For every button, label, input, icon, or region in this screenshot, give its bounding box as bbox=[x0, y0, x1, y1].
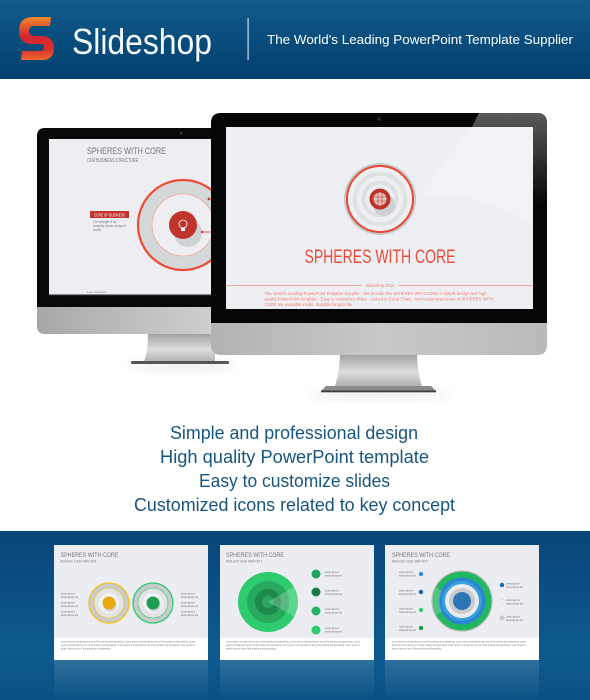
callout: core of business: world bbox=[93, 228, 101, 232]
body text: Lorem Ipsum is simply dummy text of the printing and typesetting. Lorem Ipsum is simply dummy text of the printing and typesetting. Lorem bbox=[226, 640, 361, 644]
callout: core of business bbox=[90, 211, 129, 232]
feature list: Customized icons related to key concept bbox=[134, 494, 455, 515]
dot labels: simply dummy text bbox=[399, 574, 416, 578]
slide thumbnail 3: REPLACE YOUR OWN TEXT bbox=[392, 560, 428, 564]
dot labels: simply dummy text bbox=[399, 610, 416, 614]
dot labels: Lorem ipsum is bbox=[399, 570, 413, 574]
feature list: Easy to customize slides bbox=[199, 470, 390, 491]
icon: Slideshop logo bbox=[19, 17, 54, 60]
icon labels: simply dummy text bbox=[325, 610, 342, 614]
icon labels: simply dummy text bbox=[325, 592, 342, 596]
labels: simply dummy text bbox=[181, 604, 198, 608]
slide description: CORE are available inside. Suitable for pptx file. bbox=[264, 302, 354, 307]
bezel sheen bbox=[472, 113, 547, 205]
slide footer: Logo Company bbox=[87, 290, 106, 294]
slide description: The World's Leading PowerPoint Template Supplier - We provide this SPHERES WITH CORE in simple design and high bbox=[264, 291, 487, 296]
dot labels: simply dummy text bbox=[399, 592, 416, 596]
green sphere bbox=[133, 583, 173, 623]
body text: Ipsum is simply dummy text of the printing and typesetting. Lorem Ipsum is simply dummy text of the printing and typesetting. Lorem Ipsum is bbox=[226, 643, 360, 647]
right monitor bbox=[211, 113, 547, 397]
monitor body bbox=[211, 113, 547, 323]
sphere emblem bbox=[344, 163, 416, 235]
labels bbox=[61, 592, 198, 617]
brand name: Slideshop bbox=[72, 21, 212, 62]
body text bbox=[392, 640, 527, 650]
dot labels: simply dummy text bbox=[399, 628, 416, 632]
slide title: SPHERES WITH CORE bbox=[304, 247, 456, 268]
feature list: Simple and professional design bbox=[170, 422, 418, 443]
dot labels: Lorem ipsum is bbox=[399, 588, 413, 592]
monitor body bbox=[37, 128, 215, 307]
left monitor bbox=[37, 128, 237, 369]
body text: Lorem Ipsum is simply dummy text of the printing and typesetting. Lorem Ipsum is simply dummy text of the printing and typesetting. Lorem bbox=[61, 640, 196, 644]
icon labels: simply dummy text bbox=[325, 574, 342, 578]
feature list bbox=[134, 422, 455, 515]
slide description bbox=[264, 291, 494, 307]
labels: Lorem ipsum is bbox=[61, 592, 75, 596]
slide title: SPHERES WITH CORE bbox=[87, 146, 166, 157]
dot labels: simply dummy text bbox=[506, 618, 523, 622]
slide thumbnail 2: REPLACE YOUR OWN TEXT bbox=[226, 560, 262, 564]
callout: core of business: CORE OF BUSINESS bbox=[94, 212, 125, 218]
dot labels: Lorem ipsum is bbox=[506, 582, 520, 586]
dot labels: Lorem ipsum is bbox=[506, 614, 520, 618]
slide screen bbox=[49, 139, 228, 295]
slide thumbnail 2: SPHERES WITH CORE bbox=[226, 552, 285, 559]
callout: core of business: The strength of our bbox=[93, 220, 118, 224]
labels: simply dummy text bbox=[181, 595, 198, 599]
body text: Lorem Ipsum is simply dummy text of the printing and typesetting. Lorem Ipsum is simply dummy text of the printing and typesetting. Lorem bbox=[392, 640, 527, 644]
monitor stand bbox=[144, 334, 215, 362]
yellow sphere bbox=[89, 583, 129, 623]
dot labels: simply dummy text bbox=[506, 585, 523, 589]
dot labels: simply dummy text bbox=[506, 602, 523, 606]
body text: simply dummy text of the printing and typesetting. bbox=[61, 646, 111, 650]
labels: Lorem ipsum is bbox=[181, 610, 195, 614]
monitor stand bbox=[335, 355, 422, 386]
header bar bbox=[0, 0, 590, 79]
body text bbox=[61, 640, 196, 650]
labels: Lorem ipsum is bbox=[61, 610, 75, 614]
labels: simply dummy text bbox=[61, 613, 78, 617]
body text: simply dummy text of the printing and typesetting. bbox=[226, 646, 276, 650]
bottom band bbox=[0, 531, 590, 700]
divider line bbox=[248, 18, 249, 60]
labels: simply dummy text bbox=[181, 613, 198, 617]
green target chart bbox=[238, 572, 299, 632]
dot labels bbox=[399, 570, 523, 632]
left dots bbox=[419, 572, 423, 630]
icon labels bbox=[325, 570, 342, 634]
slide thumbnail 1 bbox=[54, 545, 208, 700]
slide thumbnail 3 bbox=[385, 545, 539, 700]
body text: Ipsum is simply dummy text of the printing and typesetting. Lorem Ipsum is simply dummy text of the printing and typesetting. Lorem Ipsum is bbox=[392, 643, 526, 647]
dot labels: Lorem ipsum is bbox=[399, 624, 413, 628]
slide thumbnail 1: REPLACE YOUR OWN TEXT bbox=[60, 560, 97, 564]
dot labels: Lorem ipsum is bbox=[506, 598, 520, 602]
slide screen bbox=[226, 127, 533, 309]
sphere diagram bbox=[136, 178, 211, 272]
icon labels: Lorem ipsum is bbox=[325, 607, 339, 611]
right dots bbox=[500, 583, 504, 620]
icon: globe core bbox=[370, 188, 390, 210]
icon labels: simply dummy text bbox=[325, 630, 342, 634]
body text: Ipsum is simply dummy text of the printing and typesetting. Lorem Ipsum is simply dummy text of the printing and typesetting. Lorem Ipsum is bbox=[61, 643, 195, 647]
feature list: High quality PowerPoint template bbox=[160, 446, 429, 467]
icon labels: Lorem ipsum is bbox=[325, 570, 339, 574]
labels: simply dummy text bbox=[61, 604, 78, 608]
icon labels: Lorem ipsum is bbox=[325, 588, 339, 592]
blue and green sphere chart bbox=[432, 571, 492, 631]
slide thumbnail 3: SPHERES WITH CORE bbox=[392, 552, 451, 559]
slide description: quality PowerPoint template - Easy to customize slides - Linked to Excel Chart - And customized icons of SPHERES WITH bbox=[264, 296, 494, 302]
labels: Lorem ipsum is bbox=[181, 600, 195, 604]
body text: simply dummy text of the printing and typesetting. bbox=[392, 646, 442, 650]
icon list bbox=[312, 570, 320, 634]
slide thumbnail 1: SPHERES WITH CORE bbox=[60, 552, 119, 559]
slide thumbnail 2 bbox=[220, 545, 374, 700]
tagline: The World's Leading PowerPoint Template Supplier bbox=[267, 32, 574, 47]
icon labels: Lorem ipsum is bbox=[325, 626, 339, 630]
divider with year: Slideshop 2014 bbox=[366, 283, 395, 289]
dot labels: Lorem ipsum is bbox=[399, 606, 413, 610]
slide subtitle: OUR BUSINESS STRUCTURE bbox=[87, 158, 138, 164]
labels: Lorem ipsum is bbox=[181, 592, 195, 596]
labels: Lorem ipsum is bbox=[61, 600, 75, 604]
callout: core of business: company shown at layer it bbox=[93, 224, 126, 228]
body text bbox=[226, 640, 361, 650]
labels: simply dummy text bbox=[61, 595, 78, 599]
